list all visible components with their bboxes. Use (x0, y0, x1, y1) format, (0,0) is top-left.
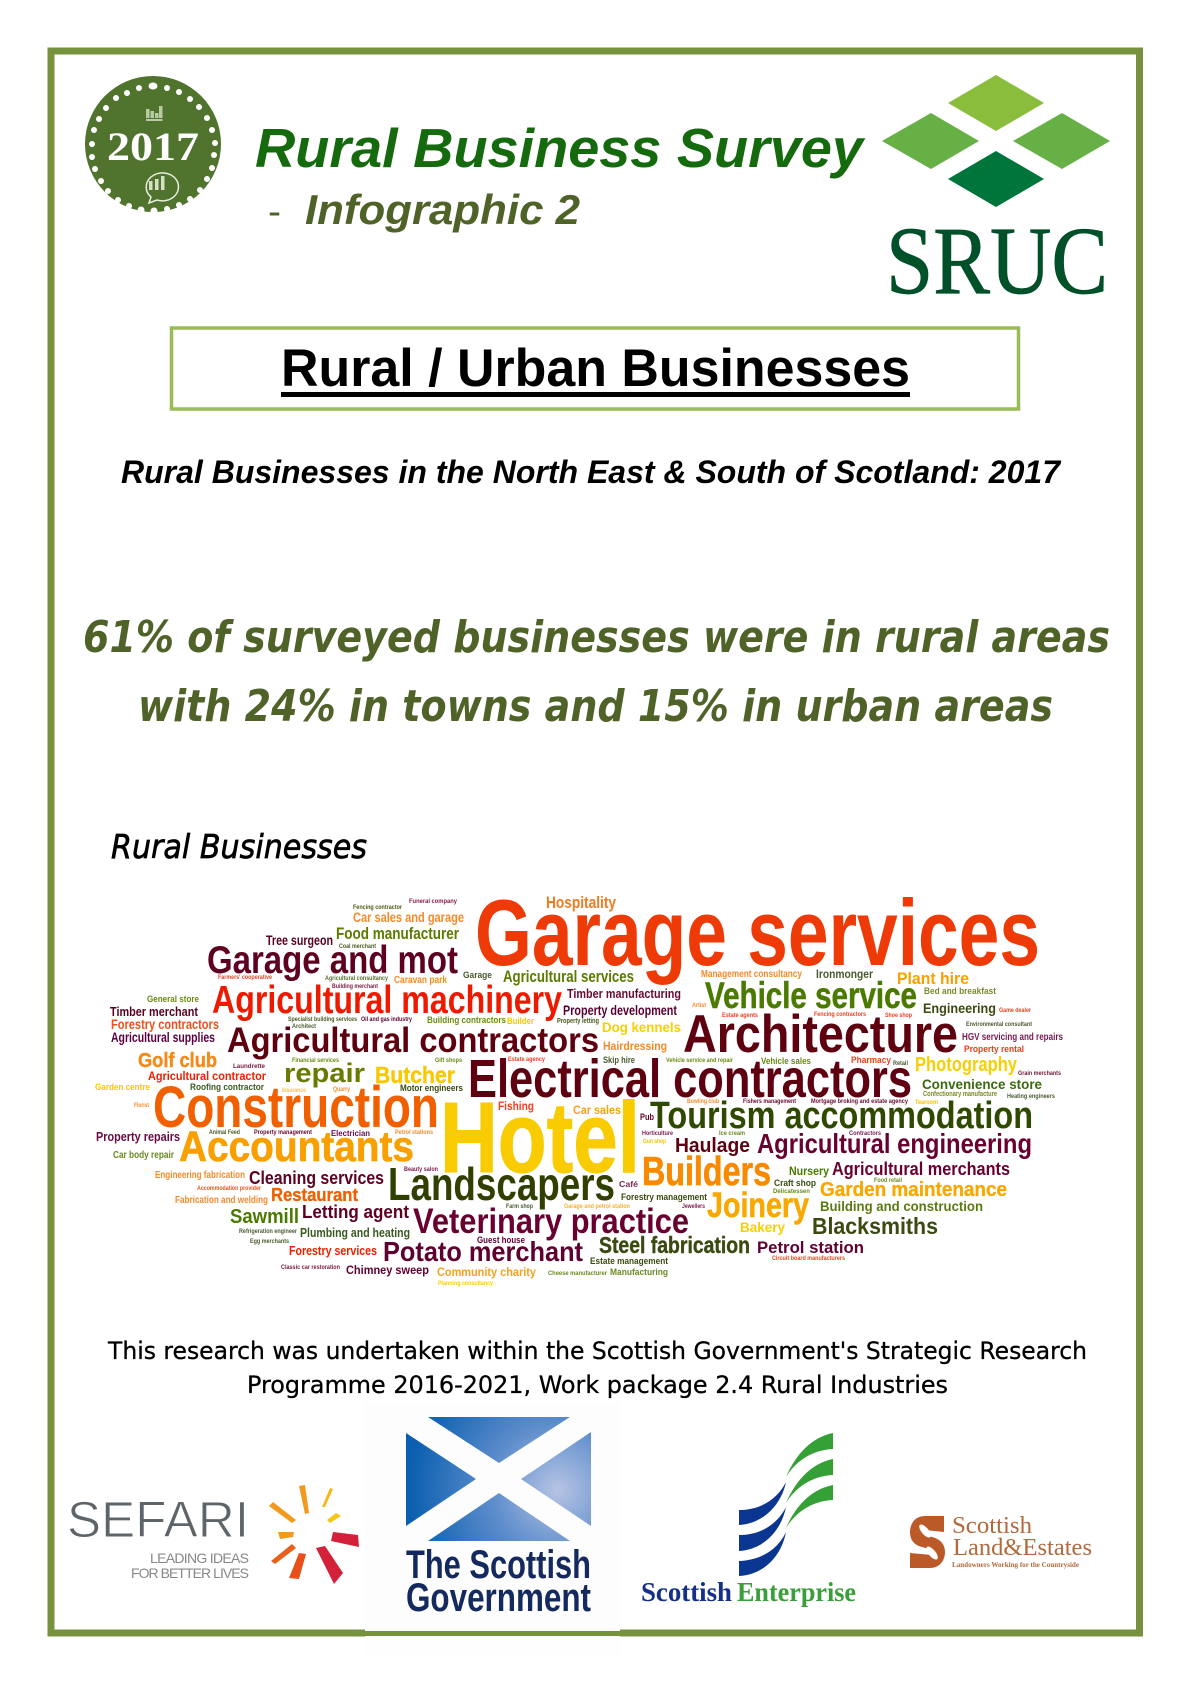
word cloud: rural business types: Contractors (849, 1131, 882, 1137)
word cloud: rural business types: HGV servicing and repairs (962, 1032, 1063, 1043)
word cloud: rural business types: Food retail (874, 1178, 902, 1184)
logo: Scottish Land & Estates: Landowners Working for the Countryside (952, 1560, 1080, 1569)
word cloud: rural business types: Petrol station (757, 1238, 864, 1257)
word cloud: rural business types: Restaurant (271, 1185, 358, 1205)
word cloud: rural business types: Community charity (437, 1265, 536, 1279)
word cloud: rural business types: Coal merchant (339, 944, 376, 950)
word cloud: rural business types: Delicatessen (773, 1189, 810, 1195)
word: Garage services: Garage services (475, 880, 1040, 985)
word cloud: rural business types: Management consultancy (701, 969, 802, 980)
word: Electrical contractors: Electrical contractors (468, 1049, 912, 1109)
word cloud: rural business types: Pharmacy (851, 1055, 891, 1065)
word cloud: rural business types: Egg merchants (250, 1239, 290, 1245)
word cloud: rural business types: Quarry (333, 1087, 351, 1093)
dash before subtitle: - (268, 191, 281, 233)
word cloud: rural business types: Caravan park (394, 975, 447, 986)
logo: Scottish Land & Estates (910, 1513, 1092, 1569)
word cloud: rural business types: Artist (692, 1003, 706, 1009)
logo: Scottish Enterprise: Enterprise (737, 1577, 856, 1607)
word cloud: rural business types: Property rental (964, 1044, 1024, 1054)
word cloud: rural business types: Property repairs (96, 1129, 180, 1144)
footer text: research acknowledgement (107, 1337, 1087, 1399)
word cloud: rural business types: Letting agent (302, 1202, 409, 1222)
word cloud: rural business types: Builder (507, 1016, 534, 1026)
word cloud: rural business types: Planning consultancy (438, 1281, 494, 1287)
logo: Scottish Land & Estates: Land&Estates (953, 1535, 1092, 1561)
word: Architecture: Architecture (683, 1005, 958, 1064)
word cloud: rural business types: Tourism accommodation (650, 1095, 1033, 1137)
word cloud: rural business types: Forestry contractors (111, 1016, 219, 1032)
word cloud: rural business types: Property development (563, 1002, 677, 1018)
word cloud: rural business types: Garage and mot (207, 939, 458, 982)
word cloud: rural business types: Convenience store (922, 1076, 1042, 1092)
word cloud: rural business types: Vehicle service (705, 975, 917, 1016)
word cloud: rural business types: Heating engineers (1007, 1094, 1056, 1100)
word cloud: rural business types: Photography (915, 1054, 1018, 1076)
word cloud: rural business types (95, 880, 1063, 1287)
word cloud: rural business types: Joinery (707, 1186, 809, 1225)
word cloud: rural business types: Plumbing and heating (300, 1225, 410, 1240)
word cloud: rural business types: Fishing (498, 1099, 534, 1113)
word cloud: rural business types: Classic car restoration (281, 1265, 340, 1271)
word cloud: rural business types: Roofing contractor (190, 1082, 264, 1092)
word cloud: rural business types: Builders (642, 1148, 771, 1194)
word cloud: rural business types: Retail (893, 1061, 908, 1067)
word cloud: rural business types: Agricultural machinery (212, 979, 562, 1022)
word cloud: rural business types: Skip hire (603, 1055, 635, 1065)
word cloud: rural business types: Laundrette (233, 1064, 266, 1070)
word cloud: rural business types: Property management (254, 1130, 312, 1136)
word cloud: rural business types: Farm shop (506, 1204, 533, 1210)
logo: SEFARI: SEFARI (67, 1491, 249, 1548)
word cloud: rural business types: Mortgage broking and estate agency (811, 1099, 909, 1105)
logo: SEFARI: LEADING IDEAS (150, 1550, 249, 1566)
logo: Scottish Enterprise (641, 1433, 856, 1607)
word cloud: rural business types: Game dealer (999, 1008, 1032, 1014)
word cloud: rural business types: Nursery (789, 1164, 829, 1178)
word cloud: rural business types: Specialist building services (288, 1017, 358, 1023)
word cloud: rural business types: Insurance (282, 1088, 307, 1094)
word cloud: rural business types: Gun shop (643, 1139, 666, 1145)
word cloud: rural business types: Tearoom (915, 1100, 938, 1106)
word cloud: rural business types: Forestry management (621, 1192, 707, 1202)
word cloud: rural business types: Timber merchant (110, 1004, 199, 1019)
word cloud: rural business types: Estate agents (722, 1013, 759, 1019)
word cloud: rural business types: Garden maintenance (820, 1179, 1007, 1201)
word: Hotel: Hotel (440, 1082, 640, 1194)
word cloud: rural business types: General store (147, 994, 199, 1004)
word cloud: rural business types: Tree surgeon (266, 932, 333, 948)
logo: The Scottish Government: The Scottish (406, 1543, 591, 1587)
word cloud: rural business types: Building contractors (427, 1015, 506, 1025)
word cloud: rural business types: Circuit board manufacturers (772, 1256, 846, 1262)
word cloud: rural business types: Architect (292, 1024, 316, 1030)
word cloud: rural business types: Veterinary practice (413, 1202, 689, 1241)
logo: Scottish Enterprise: Scottish (641, 1577, 732, 1607)
word cloud: rural business types: Craft shop (774, 1178, 816, 1188)
word cloud: rural business types: Timber manufacturing (567, 986, 681, 1001)
word cloud: rural business types: Engineering (923, 1000, 996, 1016)
word cloud: rural business types: Sawmill (230, 1206, 299, 1228)
word cloud: rural business types: Electrician (331, 1129, 370, 1138)
key finding text (83, 612, 1110, 732)
logo: The Scottish Government: Government (406, 1576, 591, 1620)
word cloud: rural business types: Steel fabrication (599, 1232, 750, 1258)
word cloud: rural business types: Financial services (292, 1058, 340, 1064)
word cloud: rural business types: Agricultural consultancy (325, 976, 389, 982)
section heading: Rural Businesses: Rural Businesses (111, 827, 367, 866)
word cloud: rural business types: Manufacturing (610, 1267, 668, 1277)
word cloud: rural business types: Fishers management (743, 1099, 796, 1105)
word cloud: rural business types: Florist (134, 1103, 149, 1109)
word cloud: rural business types: Ironmonger (816, 967, 873, 981)
word cloud: rural business types: Agricultural contractors (227, 1021, 599, 1060)
logo: SEFARI (67, 1485, 359, 1584)
word cloud: rural business types: repair (284, 1058, 366, 1088)
word cloud: rural business types: Funeral company (409, 898, 457, 905)
word cloud: rural business types: Cleaning services (249, 1168, 384, 1188)
word cloud: rural business types: Accommodation provider (197, 1186, 262, 1192)
word cloud: rural business types: Garage and petrol station (564, 1204, 630, 1210)
word cloud: rural business types: Accountants (179, 1123, 414, 1171)
logo: SEFARI: FOR BETTER LIVES (131, 1565, 249, 1581)
word cloud: rural business types: Bakery (740, 1219, 785, 1235)
word cloud: rural business types: Agricultural merchants (832, 1159, 1010, 1179)
key finding text: with 24% in towns and 15% in urban areas (138, 681, 1053, 732)
word cloud: rural business types: Chimney sweep (346, 1263, 429, 1277)
word cloud: rural business types: Estate management (590, 1256, 668, 1266)
word cloud: rural business types: Vehicle service and repair (666, 1058, 734, 1064)
word: Landscapers: Landscapers (388, 1158, 615, 1210)
word cloud: rural business types: Car sales and garage (353, 909, 464, 925)
word cloud: rural business types: Grain merchants (1018, 1071, 1062, 1077)
word: Construction: Construction (153, 1075, 439, 1140)
word cloud: rural business types: Building merchant (332, 984, 378, 990)
heading box: Rural / Urban Businesses: Rural / Urban Businesses (281, 339, 910, 398)
word cloud: rural business types: Garage (463, 970, 492, 980)
icon: 2017 survey badge (85, 76, 221, 214)
word cloud: rural business types: Gift shops (435, 1058, 463, 1064)
word cloud: rural business types: Café (619, 1180, 639, 1189)
word cloud: rural business types: Beauty salon (404, 1167, 438, 1173)
word cloud: rural business types: Property letting (557, 1018, 599, 1025)
word cloud: rural business types: Animal Feed (209, 1130, 240, 1136)
title: Rural Business Survey: Rural Business Survey (255, 117, 865, 179)
word cloud: rural business types: Engineering fabrication (155, 1170, 245, 1181)
word cloud: rural business types: Shoe shop (885, 1013, 912, 1019)
word cloud: rural business types: Vehicle sales (761, 1056, 811, 1066)
word cloud: rural business types: Petrol stations (395, 1130, 434, 1136)
word cloud: rural business types: Horticulture (642, 1131, 674, 1137)
word cloud: rural business types: Estate agency (508, 1057, 546, 1063)
word cloud: rural business types: Potato merchant (383, 1236, 583, 1267)
word cloud: rural business types: Blacksmiths (812, 1213, 938, 1239)
word cloud: rural business types: Environmental consultant (966, 1022, 1032, 1028)
word cloud: rural business types: Golf club (138, 1050, 217, 1072)
word cloud: rural business types: Haulage (675, 1135, 750, 1157)
word cloud: rural business types: Butcher (375, 1062, 455, 1088)
word cloud: rural business types: Fencing contractor (353, 904, 402, 911)
word cloud: rural business types: Agricultural supplies (111, 1029, 215, 1045)
footer text: research acknowledgement: This research was undertaken within the Scottish Government's Strategic Research (107, 1337, 1087, 1365)
word cloud: rural business types: Cheese manufacturer (548, 1271, 608, 1277)
word cloud: rural business types: Bed and breakfast (924, 986, 996, 996)
word cloud: rural business types: Bowling club (687, 1099, 719, 1105)
word cloud: rural business types: Agricultural engineering (757, 1128, 1032, 1159)
heading box: Rural / Urban Businesses (172, 328, 1018, 409)
word cloud: rural business types: Pub (640, 1112, 654, 1122)
word cloud: rural business types: Garden centre (95, 1082, 150, 1092)
word cloud: rural business types: Fencing contractors (814, 1012, 867, 1018)
logo: The Scottish Government (365, 1403, 620, 1658)
word cloud: rural business types: Refrigeration engineer (239, 1229, 298, 1235)
word cloud: rural business types: Ice cream (719, 1131, 745, 1137)
word cloud: rural business types: Building and construction (820, 1198, 983, 1214)
icon: 2017 survey badge: 2017 (107, 124, 199, 169)
word cloud: rural business types: Guest house (477, 1235, 525, 1245)
logo: SRUC: SRUC (886, 207, 1108, 314)
word cloud: rural business types: Agricultural contractor (148, 1069, 266, 1083)
word cloud: rural business types: Plant hire (897, 969, 969, 988)
word cloud: rural business types: Food manufacturer (336, 924, 459, 943)
word cloud: rural business types: Hospitality (546, 893, 616, 912)
word cloud: rural business types: Fabrication and welding (175, 1195, 268, 1206)
word cloud: rural business types: Jewellers (682, 1204, 706, 1210)
logo: Scottish Land & Estates: Scottish (952, 1513, 1032, 1539)
word cloud: rural business types: Hairdressing (603, 1039, 667, 1053)
word cloud: rural business types: Motor engineers (400, 1083, 463, 1093)
word cloud: rural business types: Agricultural services (503, 967, 634, 986)
word cloud: rural business types: Dog kennels (602, 1019, 681, 1035)
word cloud: rural business types: Oil and gas industry (361, 1017, 413, 1023)
word cloud: rural business types: Car body repair (113, 1150, 174, 1161)
subheading: region and year: Rural Businesses in the North East & South of Scotland: 2017 (121, 454, 1062, 490)
word cloud: rural business types: Forestry services (289, 1243, 377, 1258)
subtitle: Infographic 2: Infographic 2 (305, 186, 580, 233)
logo: SRUC (882, 75, 1110, 314)
word cloud: rural business types: Farmers' cooperative (218, 975, 273, 981)
word cloud: rural business types: Car sales (573, 1103, 621, 1117)
footer text: research acknowledgement: Programme 2016-2021, Work package 2.4 Rural Industries (247, 1371, 948, 1399)
word cloud: rural business types: Confectionary manufacture (923, 1091, 997, 1098)
